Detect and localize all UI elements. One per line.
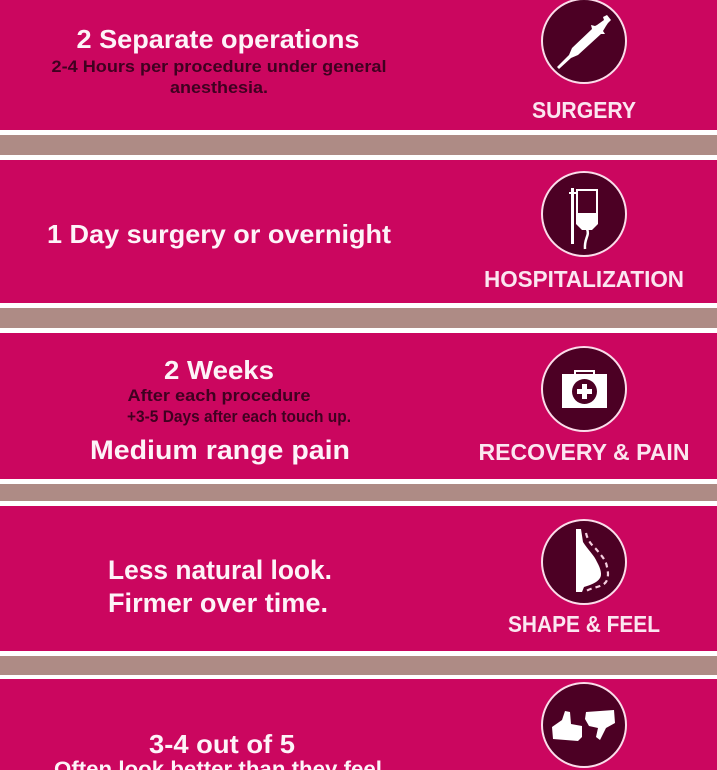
text: firmer over time: Firmer over time.: [108, 588, 328, 618]
icon: thumbs up and down: [542, 683, 626, 767]
text: days after touch up: +3-5 Days after each touch up.: [127, 408, 351, 426]
label: recovery and pain: RECOVERY & PAIN: [478, 439, 690, 465]
text: less natural look: Less natural look.: [108, 555, 332, 585]
icon: first aid kit: [542, 347, 626, 431]
panel: hospitalization: [0, 160, 717, 303]
heading: 3-4 out of 5: 3-4 out of 5: [149, 729, 295, 759]
icon: syringe: [542, 0, 626, 83]
divider band 2: [0, 308, 717, 328]
divider band 1: [0, 135, 717, 155]
divider band 4: [0, 656, 717, 675]
divider band 3: [0, 484, 717, 501]
panel: shape and feel: [0, 506, 717, 651]
panel: recovery and pain: [0, 333, 717, 479]
text: after each procedure: After each procedure: [128, 387, 310, 405]
text: medium range pain: Medium range pain: [90, 435, 350, 465]
icon: breast profile: [542, 520, 626, 604]
heading: 2 weeks: 2 Weeks: [164, 355, 274, 385]
panel: surgery: [0, 0, 717, 130]
panel: satisfaction: [0, 679, 717, 770]
label: surgery: SURGERY: [532, 97, 636, 123]
text: hours per procedure: 2-4 Hours per procedure under general: [52, 58, 386, 76]
text: anesthesia: anesthesia.: [170, 79, 268, 97]
label: shape and feel: SHAPE & FEEL: [508, 611, 660, 637]
heading: 2 separate operations: 2 Separate operations: [76, 24, 360, 54]
icon: iv drip: [542, 172, 626, 256]
heading: 1 day surgery: 1 Day surgery or overnight: [47, 219, 391, 249]
label: hospitalization: HOSPITALIZATION: [484, 266, 684, 292]
